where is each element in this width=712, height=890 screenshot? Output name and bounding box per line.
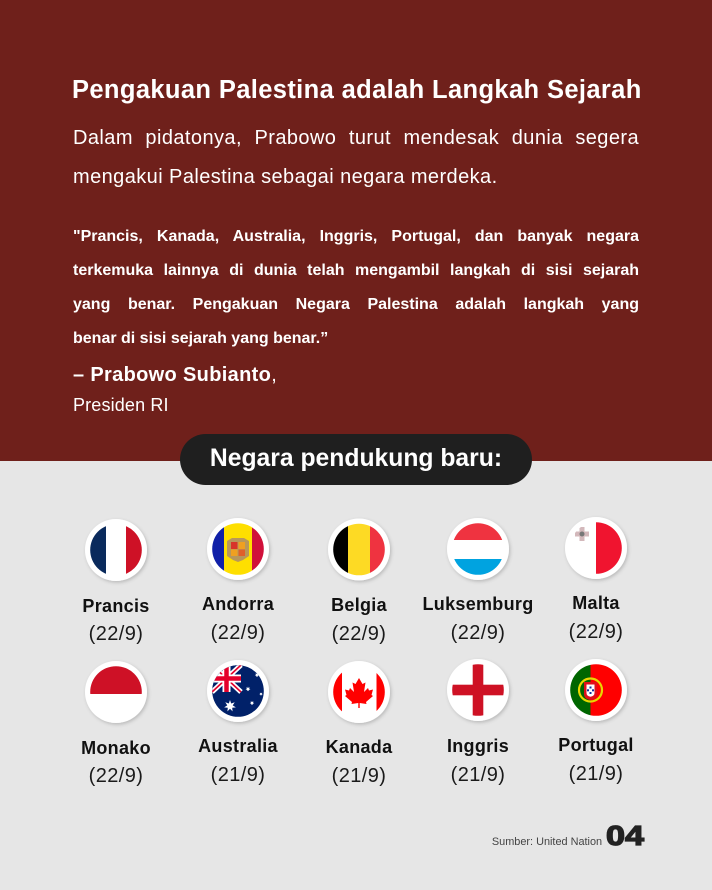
- country: Australia: (21/9): [211, 764, 265, 786]
- country: Andorra: (22/9): [211, 622, 265, 644]
- heading pill: new supporting countries: [180, 434, 532, 485]
- country: Prancis: (22/9): [89, 623, 143, 645]
- text block: quote attribution: Presiden RI: [73, 395, 169, 415]
- country: Inggris: Inggris: [447, 736, 509, 756]
- icon: flag of Belgium: [328, 518, 390, 580]
- country: Malta: Malta: [572, 593, 620, 613]
- country: Luksemburg: [422, 518, 534, 644]
- icon: flag of Canada: [328, 661, 390, 723]
- country: Luksemburg: (22/9): [451, 622, 505, 644]
- page number: 04: [606, 820, 645, 851]
- icon: flag of Malta: [565, 517, 627, 579]
- country: Inggris: (21/9): [451, 764, 505, 786]
- country grid: [82, 517, 645, 846]
- panel: dark red header background: [0, 0, 712, 461]
- heading: Palestine recognition: Pengakuan Palestina adalah Langkah Sejarah: [72, 76, 642, 104]
- country: Australia: Australia: [198, 736, 279, 756]
- country: Monako: Monako: [81, 738, 151, 758]
- country: Monako: [81, 661, 151, 787]
- country: Australia: [198, 660, 279, 786]
- country: Andorra: Andorra: [202, 594, 275, 614]
- country: Belgia: (22/9): [332, 623, 386, 645]
- country: Malta: (22/9): [569, 621, 623, 643]
- icon: flag of Andorra: [207, 518, 269, 580]
- icon: flag of France: [85, 519, 147, 581]
- icon: flag of Monaco: [85, 661, 147, 723]
- text block: quotation: "Prancis, Kanada, Australia, Inggris, Portugal, dan banyak negara: [73, 228, 639, 245]
- text block: quote attribution: [73, 365, 277, 415]
- country: Luksemburg: Luksemburg: [422, 594, 534, 614]
- country: Portugal: Portugal: [558, 735, 634, 755]
- country: Kanada: (21/9): [332, 765, 386, 787]
- country: Prancis: Prancis: [82, 596, 150, 616]
- heading pill: new supporting countries: Negara pendukung baru:: [210, 445, 502, 472]
- country: Prancis: [82, 519, 150, 645]
- text block: introduction: [73, 128, 639, 187]
- country: Kanada: Kanada: [326, 737, 393, 757]
- icon: flag of Australia: [207, 660, 269, 722]
- country: Portugal: [558, 659, 634, 785]
- text block: quotation: terkemuka lainnya di dunia telah mengambil langkah di sisi sejarah: [73, 262, 639, 279]
- country: Andorra: [202, 518, 275, 644]
- source note: Sumber: United Nation: [492, 836, 602, 848]
- country: Inggris: [447, 659, 509, 786]
- country: Belgia: [328, 518, 390, 645]
- text block: quotation: yang benar. Pengakuan Negara Palestina adalah langkah yang: [73, 296, 639, 313]
- text block: quotation: benar di sisi sejarah yang benar.”: [73, 330, 328, 347]
- country: Malta: [565, 517, 627, 643]
- icon: flag of England: [447, 659, 509, 721]
- country: Portugal: (21/9): [569, 763, 623, 785]
- icon: flag of Luxembourg: [447, 518, 509, 580]
- text block: quotation: [73, 228, 639, 347]
- country: Monako: (22/9): [89, 765, 143, 787]
- icon: flag of Portugal: [565, 659, 627, 721]
- country: Kanada: [326, 661, 393, 787]
- country: Belgia: Belgia: [331, 595, 388, 615]
